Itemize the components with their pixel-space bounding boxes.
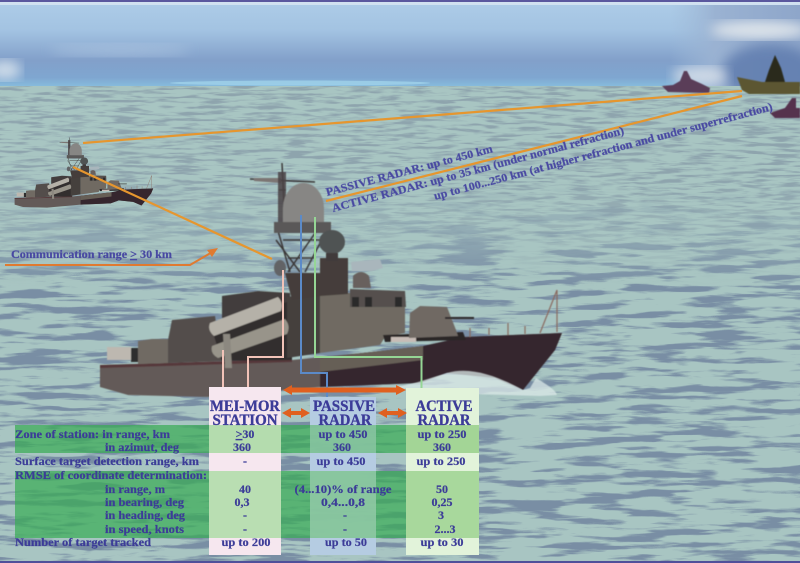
table values: passive radar: (4...10)% of range	[294, 482, 392, 496]
communication range arrow	[5, 248, 218, 265]
table values: passive radar: -	[343, 522, 347, 536]
table row labels: Number of target tracked	[15, 535, 151, 549]
left ship	[15, 137, 153, 208]
table values: passive radar: up to 50	[325, 535, 367, 549]
column headings	[210, 398, 472, 429]
table row labels: Zone of station: in range, km	[15, 427, 170, 441]
table values: active radar: 0,25	[432, 495, 452, 509]
double arrow: left small	[282, 408, 310, 418]
communication range label: Communication range > 30 km	[11, 247, 172, 261]
column: active radar	[406, 388, 479, 555]
table values: MEI-MOR: 360	[233, 440, 251, 454]
column: MEI-MOR station	[209, 387, 281, 555]
passive radar range label: PASSIVE RADAR: up to 450 km	[324, 141, 494, 199]
column headings: MEI-MOR	[210, 398, 281, 415]
column headings: RADAR	[318, 412, 372, 429]
background: sky	[0, 0, 800, 100]
table row labels: in bearing, deg	[105, 495, 184, 509]
table values: passive radar: 0,4...0,8	[321, 495, 365, 509]
table values: active radar: 50	[436, 482, 448, 496]
column headings: STATION	[212, 412, 278, 429]
table values: active radar: 2...3	[434, 522, 456, 536]
table: green row bands	[15, 425, 479, 538]
table values: MEI-MOR: >30	[236, 427, 254, 441]
table values: passive radar: -	[343, 508, 347, 522]
table values: active radar: 3	[438, 508, 444, 522]
distant ship: purple lower	[770, 98, 800, 118]
main ship	[100, 163, 562, 397]
table values: MEI-MOR: -	[243, 508, 247, 522]
orange signal lines	[73, 91, 742, 259]
table row labels: in range, m	[105, 482, 165, 496]
column headings: PASSIVE	[313, 398, 375, 415]
wake	[388, 371, 557, 396]
double arrow: right small	[378, 408, 407, 418]
double arrow: top	[283, 385, 406, 395]
table values: passive radar: up to 450	[316, 454, 366, 468]
table values: MEI-MOR	[222, 427, 270, 549]
active radar range label: ACTIVE RADAR: up to 35 km (under normal refraction)	[330, 123, 625, 215]
table values: MEI-MOR: 40	[239, 482, 251, 496]
table row labels: in speed, knots	[105, 522, 184, 536]
table values: active radar	[416, 427, 466, 549]
distant ship: purple	[662, 71, 710, 93]
table values: active radar: up to 30	[420, 535, 464, 549]
distant ship: olive target	[737, 55, 800, 94]
coloured feed lines	[223, 215, 422, 397]
column: passive radar	[310, 397, 376, 555]
table row labels: in heading, deg	[105, 508, 185, 522]
table values: active radar: 360	[433, 440, 451, 454]
table values: active radar: up to 250	[416, 454, 466, 468]
table row labels	[15, 427, 207, 549]
table values: MEI-MOR: -	[243, 454, 247, 468]
table values: MEI-MOR: -	[243, 522, 247, 536]
table row labels: Surface target detection range, km	[15, 454, 199, 468]
table values: MEI-MOR: 0,3	[234, 495, 250, 509]
table values: passive radar	[294, 427, 392, 549]
table values: MEI-MOR: up to 200	[222, 535, 270, 549]
superrefraction range label: up to 100...250 km (at higher refraction and under superrefraction)	[432, 99, 774, 203]
table row labels: in azimut, deg	[105, 440, 179, 454]
column headings: RADAR	[418, 412, 471, 429]
table values: passive radar: 360	[333, 440, 351, 454]
column headings: ACTIVE	[416, 398, 472, 415]
table values: active radar: up to 250	[418, 427, 466, 441]
table values: passive radar: up to 450	[318, 427, 368, 441]
table row labels: RMSE of coordinate determination:	[15, 468, 207, 482]
